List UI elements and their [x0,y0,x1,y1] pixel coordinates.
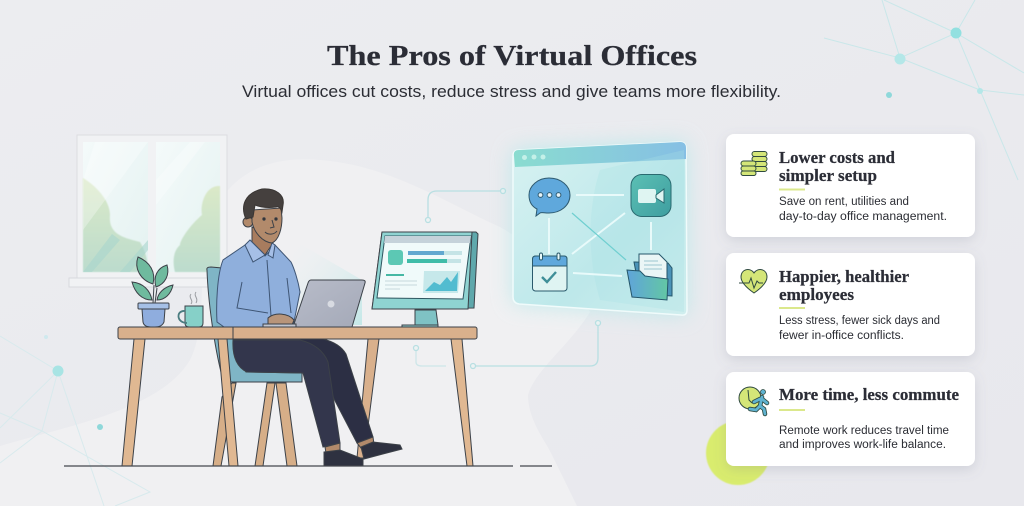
card: lower costs: simpler setup [779,166,877,185]
desk [118,327,477,466]
body text: Save on rent, utilities and [779,196,909,208]
network decoration: top right [824,0,1024,180]
icon: calendar [532,253,567,291]
person [217,189,402,466]
heading: More time, less commute [779,385,959,404]
card: lower costs: day-to-day office management. [779,211,947,223]
ankles [325,437,374,453]
trousers back leg [287,339,373,443]
shirt [217,245,300,327]
desk leg back [357,339,379,458]
lime accent circle [706,421,770,485]
accent rule [779,307,805,309]
card: happier employees [726,253,975,356]
shoes [324,442,402,466]
window [69,135,227,287]
desk scene illustration [118,189,478,466]
card: more time [726,372,975,466]
card: happier employees: fewer in-office conflicts. [779,330,904,342]
light beam behind person [290,238,362,325]
trousers front leg [233,340,340,447]
heading: Happier, healthier [779,267,909,286]
heading: Lower costs and [779,148,895,167]
connector lines [414,188,600,368]
hand [268,314,294,325]
network decoration: bottom left [0,335,150,506]
card: lower costs [726,134,975,237]
plant [132,257,173,327]
card: happier employees: employees [779,285,855,304]
neck and head [243,189,283,262]
card: more time: and improves work-life balance. [779,439,946,451]
icon: heart with pulse [739,270,767,293]
icon: folder with documents [627,254,672,300]
subtitle: Virtual offices cut costs, reduce stress and give teams more flexibility. [242,82,781,101]
floating app window panel [513,142,687,315]
monitor [372,232,478,327]
chair [207,267,302,466]
icon: coins [741,152,767,176]
laptop [263,280,365,327]
body text: Less stress, fewer sick days and [779,315,940,327]
floor line [64,465,552,467]
accent rule [779,409,805,411]
icon: clock and runner [739,387,767,414]
accent rule [779,188,805,190]
mug [178,292,203,327]
connections between app icons [549,195,651,276]
title: The Pros of Virtual Offices [327,40,697,72]
icon: chat bubble [529,178,570,216]
icon: video camera [631,174,671,216]
body text: Remote work reduces travel time [779,425,949,437]
